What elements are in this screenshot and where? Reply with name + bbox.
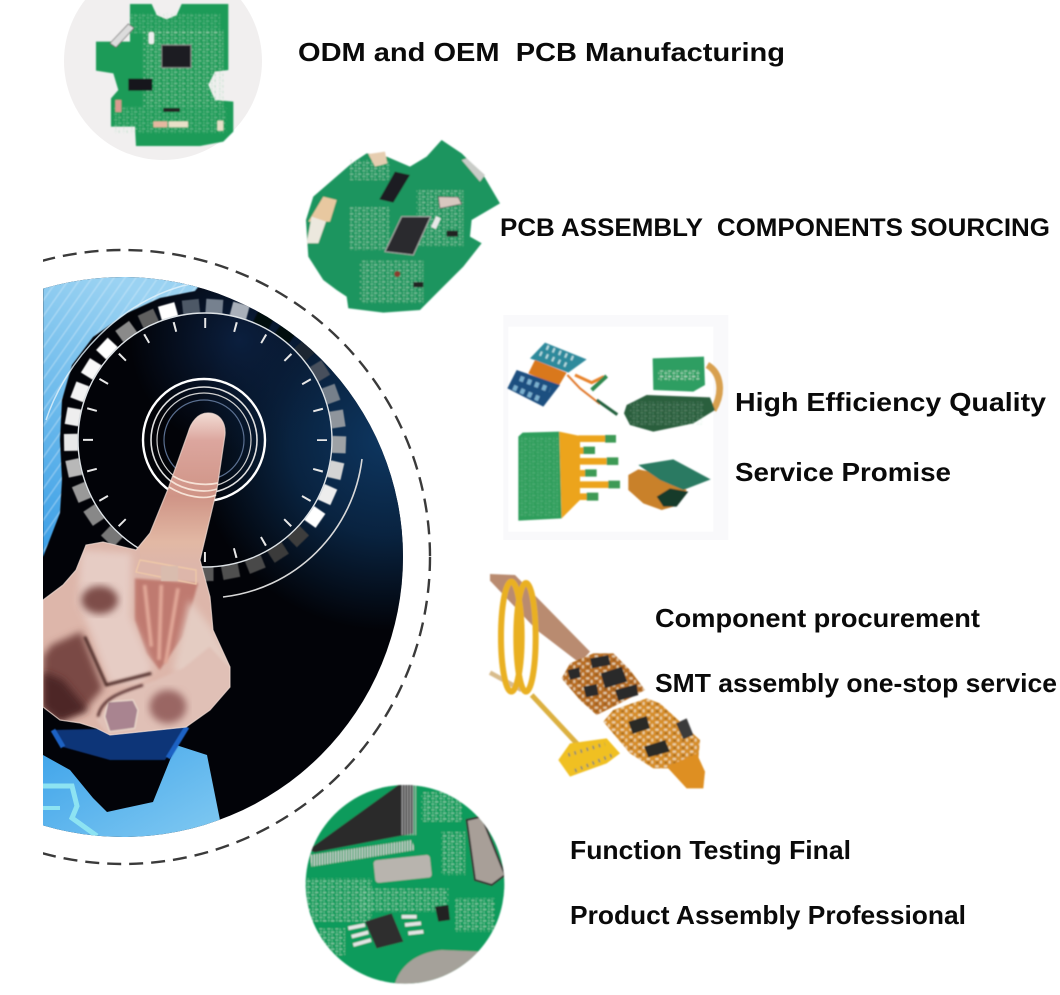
faint arc on blue [46,284,190,420]
IC side pins [401,785,416,835]
skin base [40,530,240,740]
palm crease lines [145,585,178,663]
heading: Component procurement: Component procurement [655,603,980,633]
concentric target rings [143,379,265,501]
tick marks [88,323,322,557]
clipped circular board [304,784,506,984]
lower orange assembly [603,698,705,788]
crystal and small parts [394,197,462,287]
thumb shadow [150,690,186,723]
panel: circular hero photo with hand [0,250,430,864]
panel: ODM and OEM PCB board photo [64,0,262,160]
hand silhouette with soft shading [40,410,240,740]
small transistor [435,905,450,922]
dark lower fingers [43,632,103,720]
pale back of the hand [78,550,153,683]
tan trace [490,673,522,690]
small IC with legs [348,913,423,948]
solder pad texture [305,792,495,955]
panel: flexible circuit photo [490,574,705,788]
thumb nail [105,700,138,732]
green board with orange flex fingers [518,432,620,521]
thumb crease [98,685,143,717]
dark background [43,270,408,840]
dashed outer ring [0,250,430,864]
panel: PCB close-up circle [304,784,506,984]
green base [304,784,506,984]
battery holder [395,950,482,985]
upper IC chip [379,172,410,203]
green curved board [624,357,720,432]
finger crevice [85,637,151,685]
yellow trace [532,695,577,744]
silver cylinder crystal [373,855,432,883]
thin dial circle [78,313,332,567]
yellow contact pad [558,738,620,777]
rolled flex board [628,459,711,510]
blue shirt cuff [53,727,187,760]
heading: Service Promise: Service Promise [735,457,951,487]
upper orange assembly [562,653,645,715]
main IC chip [385,217,431,255]
finger skin [140,410,230,565]
segmented squares [64,299,346,581]
pale hand rim [43,413,230,735]
green round PCB [306,140,500,313]
heading: SMT assembly one-stop service: SMT assembly one-stop service [655,668,1057,698]
heading: Product Assembly Professional: Product Assembly Professional [570,900,966,930]
big crystal [467,817,505,885]
hero disc [40,270,408,850]
solder component texture [350,160,463,303]
heading: High Efficiency Quality: High Efficiency Quality [735,387,1047,417]
darkest fold [43,672,88,722]
blue bottom-left area [43,746,220,837]
grey circle backdrop [64,0,262,160]
IC pins [310,840,415,867]
thumb [96,647,233,737]
blue rigid-flex board [507,343,617,415]
yellow coil loops [501,582,536,692]
palm crease area [135,578,198,670]
circuit assemblies [532,653,705,788]
brown flex strip [490,574,590,663]
soft shading in close-up coordinates [43,550,233,737]
ring band on finger base [136,560,196,584]
hand pointing [40,410,240,740]
heading: Function Testing Final: Function Testing Final [570,835,851,865]
large IC [308,785,413,852]
rings on finger [169,476,218,497]
knuckle shadow [81,586,118,614]
blue top-left area [43,270,212,557]
green PCB board [96,4,233,146]
palm side [173,599,230,671]
panel: rigid-flex boards photo [503,315,728,540]
panel: assembly PCB board photo [306,140,500,313]
heading: ODM and OEM: ODM and OEM PCB Manufacturing [298,37,785,67]
outer arc [223,459,362,597]
coil and strip [490,574,590,692]
backdrop inner [508,327,713,532]
heading: PCB assembly: PCB ASSEMBLY COMPONENTS SOURCING [500,214,1050,242]
dial [64,299,362,597]
connectors [307,152,485,243]
photo backdrop [503,315,728,540]
